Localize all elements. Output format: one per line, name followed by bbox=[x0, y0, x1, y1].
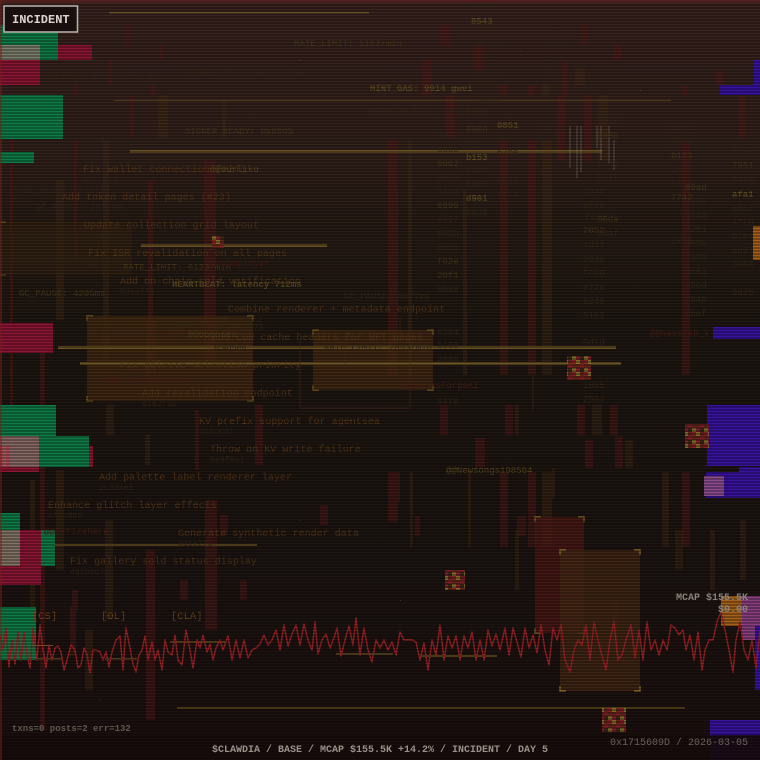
hash columns: 5add bbox=[437, 145, 459, 155]
system status text: WEBHOOK_RECV: 200 OK bbox=[369, 107, 478, 117]
handles: @@0xf1zehere bbox=[44, 527, 109, 537]
commit log text bbox=[48, 164, 445, 577]
bracket labels bbox=[32, 611, 203, 623]
hash columns: 0d1d bbox=[583, 338, 605, 348]
hash columns: 9d25 bbox=[732, 288, 754, 298]
bracket labels: [OL] bbox=[101, 611, 126, 623]
hash columns: ce56 bbox=[671, 236, 693, 246]
hash columns: 9a60 bbox=[477, 95, 499, 105]
commit log text: Fix gallery sold status display bbox=[70, 556, 257, 568]
commit log text: Add on-chain sold verification bbox=[120, 276, 301, 288]
hash columns: 5546 bbox=[597, 159, 619, 169]
hash columns: c399 bbox=[671, 179, 693, 189]
hash columns: 89ad bbox=[685, 183, 707, 193]
hash columns: e3f2 bbox=[671, 123, 693, 133]
dim static specks bbox=[60, 50, 641, 701]
glitch checker tiles bbox=[212, 236, 709, 732]
handles: @@0xDeployer bbox=[205, 259, 270, 269]
hash columns: 1805 bbox=[583, 381, 605, 391]
commit log text: Update collection grid layout bbox=[84, 220, 259, 232]
hash columns: a5bd bbox=[685, 281, 707, 291]
hash columns: 7048 bbox=[685, 295, 707, 305]
system status text: PALETTE_SELECT: 8475 bbox=[156, 323, 264, 333]
hash columns: 9826 bbox=[437, 173, 459, 183]
hash columns: d901 bbox=[466, 194, 488, 204]
commit log text: 4b5c6d7 bbox=[199, 427, 233, 437]
hash columns: 7551 bbox=[732, 161, 754, 171]
commit log text: Add token detail pages (#23) bbox=[62, 192, 231, 204]
bottom bar bbox=[0, 735, 760, 760]
commit log text: Fix palette selection priority bbox=[120, 360, 301, 372]
hash columns: 094e bbox=[583, 255, 605, 265]
hash columns: 47f0 bbox=[732, 218, 754, 228]
hash columns: e63b bbox=[437, 229, 459, 239]
market cap readout: $0.00 bbox=[718, 604, 748, 616]
footer stats: txns=0 posts=2 err=132 bbox=[12, 724, 131, 734]
title badge: INCIDENT bbox=[4, 6, 78, 32]
hash columns: 4d3f bbox=[583, 240, 605, 250]
hash columns: b153 bbox=[466, 153, 488, 163]
block: purple large right bbox=[706, 405, 760, 498]
hash columns: 83ab bbox=[466, 107, 488, 117]
thin white barcode lines bbox=[570, 126, 614, 178]
hash columns: 1989 bbox=[685, 253, 707, 263]
commit log text: 2c3d4e5 bbox=[99, 483, 133, 493]
commit log text: Fix ISR revalidation on all pages bbox=[88, 248, 287, 260]
hash columns: e53e bbox=[543, 39, 565, 49]
panel: red box lower right bbox=[535, 517, 584, 633]
hash columns: 5162 bbox=[583, 311, 605, 321]
hash columns: 20f1 bbox=[437, 271, 459, 281]
hash columns: 5a8b bbox=[597, 131, 619, 141]
footer ticker: $CLAWDIA / BASE / MCAP $155.5K +14.2% / INCIDENT / DAY 5 bbox=[212, 744, 548, 756]
hash columns: e72a bbox=[583, 283, 605, 293]
commit log text: Add palette label renderer layer bbox=[99, 472, 292, 484]
hash columns: f06d bbox=[477, 25, 499, 35]
system status text: CACHE_HIT ratio: 4915% bbox=[184, 68, 303, 78]
hash columns: f466 bbox=[466, 180, 488, 190]
system status text: GC_PAUSE: 6672ms bbox=[344, 292, 430, 302]
footer address and date: 0x1715609D / 2026-03-05 bbox=[610, 737, 748, 749]
hash columns: 3b84 bbox=[732, 260, 754, 270]
commit log text: a1b2c3d bbox=[83, 175, 117, 185]
hash columns: 9522 bbox=[466, 166, 488, 176]
commit log text: Generate synthetic render data bbox=[178, 528, 359, 540]
hash columns: d65b bbox=[685, 239, 707, 249]
hash columns: 0605 bbox=[437, 243, 459, 253]
commit log text: 3c4d5e6 bbox=[212, 343, 246, 353]
hash columns: 4ee5 bbox=[497, 134, 519, 144]
hash columns: b123 bbox=[671, 151, 693, 161]
hash columns: 2852 bbox=[583, 226, 605, 236]
thin rectangle outlines bbox=[300, 316, 533, 410]
hash columns: 5321 bbox=[465, 140, 487, 150]
hash columns: 66da bbox=[597, 215, 619, 225]
commit log text: 8e9f0a1 bbox=[210, 455, 244, 465]
hash columns: 4790 bbox=[543, 81, 565, 91]
hash columns: 783b bbox=[597, 117, 619, 127]
hash columns: 78ad bbox=[543, 25, 565, 35]
system status text: RATE_LIMIT: 2693/min bbox=[324, 343, 432, 353]
market cap readout: MCAP $155.5K bbox=[676, 592, 748, 604]
hash columns: 1c69 bbox=[437, 341, 459, 351]
hash columns: 8663 bbox=[685, 267, 707, 277]
hash columns: 6fd1 bbox=[471, 3, 493, 13]
panel: dim box upper left bbox=[0, 222, 132, 275]
hash columns: 9d19 bbox=[477, 53, 499, 63]
hash columns: 890d bbox=[466, 125, 488, 135]
commit log text: Fix wallet connection (#24) bbox=[83, 164, 246, 176]
block: green and red cluster top left bbox=[0, 25, 92, 85]
hash columns: 8f46 bbox=[583, 201, 605, 211]
handles: @@AtlasForgeAI bbox=[403, 381, 479, 391]
commit log text: 4a5b6c7 bbox=[70, 567, 104, 577]
block: purple bottom right bbox=[710, 720, 760, 760]
title badge: INCIDENT: INCIDENT bbox=[12, 13, 70, 27]
system status text: RATE_LIMIT: 6123/min bbox=[123, 263, 231, 273]
hash columns: 3978 bbox=[477, 81, 499, 91]
hash columns: 77a2 bbox=[671, 193, 693, 203]
system status text: GC_PAUSE: 2572ms bbox=[36, 203, 122, 213]
system status text: SYNC_BLOCK: #4673 bbox=[13, 186, 105, 196]
hash columns: 694b bbox=[583, 187, 605, 197]
hash columns: 775c bbox=[732, 145, 754, 155]
block: red left bbox=[0, 323, 53, 353]
block: orange and magenta lower right bbox=[721, 596, 760, 690]
system status text: SIGNER_READY: 0x8995 bbox=[185, 127, 293, 137]
hash columns: 05ef bbox=[685, 309, 707, 319]
system status text bbox=[13, 39, 478, 353]
hash columns: 6995 bbox=[437, 201, 459, 211]
hash columns: b943 bbox=[685, 211, 707, 221]
block: green and red cluster mid left bbox=[0, 405, 93, 472]
block: green left bbox=[0, 95, 63, 139]
handles: @@opensea bbox=[188, 330, 237, 340]
hash columns: 8867 bbox=[732, 204, 754, 214]
hash columns: f82e bbox=[437, 257, 459, 267]
hash columns: 9786 bbox=[465, 109, 487, 119]
hash columns: 591f bbox=[597, 173, 619, 183]
commit log text: 9a0b1c2 bbox=[228, 315, 262, 325]
block: green strip left bbox=[0, 152, 34, 163]
hash columns: 8591 bbox=[477, 39, 499, 49]
hash columns: 0470 bbox=[437, 397, 459, 407]
panel: orange box lower right bbox=[560, 550, 640, 691]
block: green and red cluster lower left bbox=[0, 513, 55, 585]
system status text: RATE_LIMIT: 1107/min bbox=[294, 39, 402, 49]
commit log text: 7a8b9c0 bbox=[120, 371, 154, 381]
commit log text: d1e2f3a bbox=[142, 399, 176, 409]
hash columns: afa1 bbox=[732, 190, 754, 200]
hash columns: 2504 bbox=[583, 395, 605, 405]
top edge tint bbox=[0, 0, 760, 3]
checker tile purple bbox=[704, 476, 724, 496]
commit log text: Add CDN cache headers for NFT pages bbox=[212, 332, 423, 344]
commit log text: KV prefix support for agentsea bbox=[199, 416, 380, 428]
handles bbox=[44, 165, 709, 537]
hash columns: 8543 bbox=[471, 17, 493, 27]
hash columns: 6384 bbox=[437, 328, 459, 338]
hash columns: 841e bbox=[732, 175, 754, 185]
block: purple bar right bbox=[713, 327, 760, 339]
handles: @@0xf1zeOnchain bbox=[105, 376, 186, 386]
handles: @@Newsongs198504 bbox=[446, 466, 532, 476]
hash columns: fc9d bbox=[583, 268, 605, 278]
market cap readout bbox=[676, 592, 748, 616]
hash columns: 0746 bbox=[543, 123, 565, 133]
commit log text: Add revalidation endpoint bbox=[142, 388, 293, 400]
hash columns: da07 bbox=[437, 215, 459, 225]
hash columns: b7ec bbox=[732, 232, 754, 242]
commit log text: Throw on KV write failure bbox=[210, 444, 361, 456]
hash columns: 5f24 bbox=[497, 190, 519, 200]
panel: orange box centre left bbox=[87, 316, 253, 401]
commit log text: Combine renderer + metadata endpoint bbox=[228, 304, 445, 316]
left edge tint bbox=[0, 0, 2, 760]
hash columns: 7a28 bbox=[466, 208, 488, 218]
hash columns: 6d97 bbox=[732, 246, 754, 256]
waveform chart bbox=[0, 612, 760, 673]
bracket labels: [CLA] bbox=[171, 611, 203, 623]
system status text: GC_PAUSE: 4205ms bbox=[19, 289, 105, 299]
commit log text: 6f7a8b9 bbox=[48, 511, 82, 521]
hash columns: 3291 bbox=[685, 225, 707, 235]
hash columns: 9d92 bbox=[437, 131, 459, 141]
commit log text: Enhance glitch layer effects bbox=[48, 500, 217, 512]
commit log text: c7d8e9f bbox=[84, 231, 118, 241]
system status text: MINT_GAS: 9914 gwei bbox=[370, 84, 473, 94]
system status text: HEARTBEAT: latency 712ms bbox=[172, 280, 302, 290]
hash columns: 6249 bbox=[583, 297, 605, 307]
hash columns: 0851 bbox=[497, 121, 519, 131]
hash columns: fb96 bbox=[477, 67, 499, 77]
hash columns: 6636 bbox=[685, 197, 707, 207]
hash columns: 67be bbox=[497, 148, 519, 158]
block: orange right bbox=[753, 226, 760, 260]
panel: orange box centre right bbox=[313, 330, 433, 390]
hash columns: 1aa9 bbox=[437, 187, 459, 197]
handles: @@basereh_x bbox=[650, 329, 709, 339]
hash columns: f066 bbox=[671, 137, 693, 147]
hash columns: 2458 bbox=[671, 165, 693, 175]
hash columns: 6dd2 bbox=[437, 159, 459, 169]
commit log text: 5d6e7f8 bbox=[120, 287, 154, 297]
hash columns: 2680 bbox=[437, 355, 459, 365]
hash columns bbox=[437, 3, 754, 407]
hash columns: 0ba8 bbox=[437, 285, 459, 295]
hash columns: ff7f bbox=[543, 67, 565, 77]
block: purple top right bbox=[720, 60, 760, 95]
hash columns: 98af bbox=[597, 229, 619, 239]
commit log text: 0d1e2f3 bbox=[178, 539, 212, 549]
system status text: WEBHOOK_RECV: 200 OK bbox=[50, 72, 159, 82]
handles: @@burliko bbox=[210, 165, 259, 175]
hash columns: f446 bbox=[584, 213, 606, 223]
hash columns: 8567 bbox=[543, 53, 565, 63]
commit log text: 1a2b1c4 bbox=[88, 259, 122, 269]
block: green bottom left bbox=[0, 607, 36, 660]
bracket labels: [CS] bbox=[32, 611, 57, 623]
hash columns: c637 bbox=[497, 176, 519, 186]
